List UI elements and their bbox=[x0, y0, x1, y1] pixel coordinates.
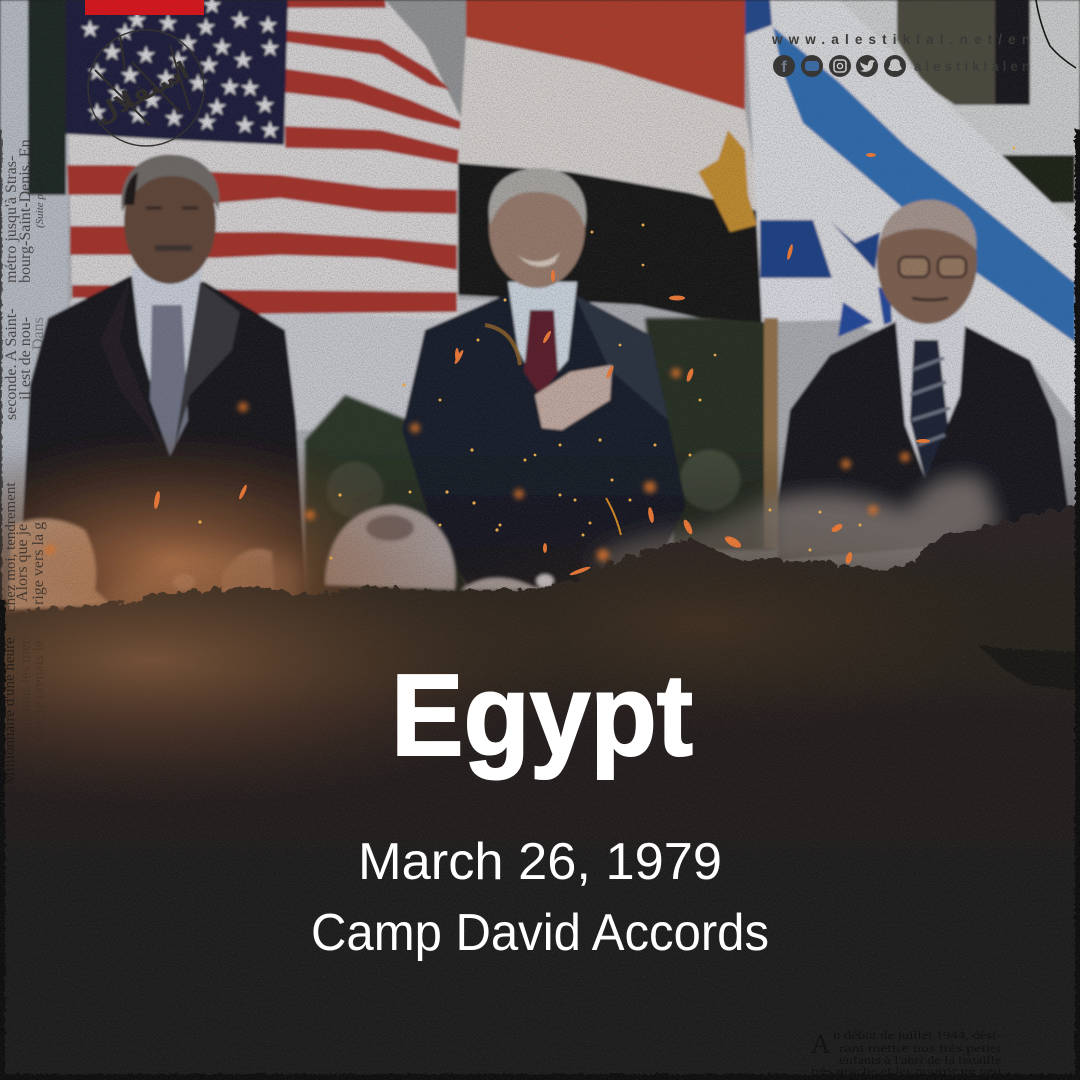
newspaper overlay: bottom right bbox=[811, 1029, 1002, 1078]
top right crack bbox=[1036, 0, 1076, 68]
newspaper overlay: bottom right: très proche et les nourrir un peu bbox=[811, 1066, 1001, 1078]
newspaper overlay: left edge: credis soir, je prenais le bbox=[31, 640, 47, 782]
stars: ★ bbox=[155, 64, 177, 92]
newspaper overlay: left edge: Dans bbox=[30, 317, 47, 350]
logo: circular calligraphy seal bbox=[88, 30, 204, 146]
stars: ★ bbox=[229, 6, 251, 34]
stars: ★ bbox=[79, 15, 101, 43]
stars: ★ bbox=[106, 79, 128, 107]
smoke haze bbox=[100, 474, 1000, 610]
icon: facebook bbox=[773, 55, 795, 77]
suit shading bbox=[0, 440, 1080, 600]
newspaper overlay: left edge: Millionnaire d'une heure bbox=[2, 637, 18, 785]
newspaper overlay: bottom right: enfants à l'abri de la bataille bbox=[839, 1055, 1001, 1067]
stars: ★ bbox=[86, 58, 108, 86]
stars: ★ bbox=[177, 29, 199, 57]
stars: ★ bbox=[234, 111, 256, 139]
torn crack mark bbox=[978, 645, 1075, 690]
photograph: leaders before flags bbox=[0, 0, 1080, 690]
newspaper overlay: left edge: rige vers la g bbox=[30, 522, 47, 605]
stars: ★ bbox=[196, 108, 218, 136]
stars: ★ bbox=[114, 18, 136, 46]
stars: ★ bbox=[163, 104, 185, 132]
newspaper overlay: left edge: (Suite page 11) bbox=[34, 161, 46, 228]
stars bbox=[79, 0, 281, 144]
newspaper overlay: bottom right: rant mettre nos très petits bbox=[839, 1043, 1002, 1055]
stars: ★ bbox=[257, 11, 279, 39]
social icons bbox=[773, 55, 1030, 77]
stars: ★ bbox=[259, 34, 281, 62]
icon: twitter bbox=[856, 55, 878, 77]
egyptian flag bbox=[458, 0, 762, 322]
stars: ★ bbox=[187, 69, 209, 97]
stars: ★ bbox=[126, 6, 148, 34]
stars: ★ bbox=[195, 13, 217, 41]
stars: ★ bbox=[101, 38, 123, 66]
stars: ★ bbox=[167, 46, 189, 74]
stars: ★ bbox=[206, 93, 228, 121]
golden arc flare bbox=[485, 325, 520, 365]
date line: March 26, 1979 bbox=[358, 833, 722, 891]
stars: ★ bbox=[127, 101, 149, 129]
embers bbox=[45, 147, 1015, 577]
newspaper overlay: left edge: il est de nou- bbox=[17, 317, 34, 400]
torn dark paper panel bbox=[0, 505, 1080, 1080]
stars: ★ bbox=[135, 41, 157, 69]
icon: facebook: f bbox=[781, 59, 787, 76]
stars: ★ bbox=[211, 33, 233, 61]
icon: snapchat bbox=[884, 55, 906, 77]
right man: Begin bbox=[778, 200, 1072, 560]
stars: ★ bbox=[254, 91, 276, 119]
stars: ★ bbox=[219, 73, 241, 101]
left orange flare bbox=[0, 430, 440, 690]
stars: ★ bbox=[119, 61, 141, 89]
newspaper overlay: bottom right: u début de juillet 1944, dési- bbox=[833, 1030, 1001, 1042]
orange glow on panel bbox=[0, 515, 570, 805]
newspaper overlay: left edge: métro jusqu'à Stras- bbox=[3, 156, 20, 283]
logo: circular calligraphy seal: استقلال bbox=[90, 56, 194, 129]
newspaper overlay: left edge: seconde. A Saint- bbox=[3, 308, 20, 420]
building backdrop bbox=[0, 0, 1080, 600]
curved ember trail bbox=[606, 498, 621, 535]
newspaper overlay: left edge: chez moi, tendrement bbox=[3, 482, 19, 612]
red tab bbox=[85, 0, 204, 15]
american flag bbox=[66, 0, 486, 320]
heading: Egypt: Egypt bbox=[391, 650, 693, 780]
israeli flag bbox=[745, 0, 1075, 420]
centre man: Carter bbox=[402, 168, 686, 590]
stripes bbox=[67, 0, 486, 314]
left man: Sadat bbox=[18, 155, 306, 610]
hedges bbox=[305, 318, 775, 600]
stars: ★ bbox=[157, 9, 179, 37]
flag pole bbox=[764, 318, 778, 548]
icon: youtube bbox=[801, 55, 823, 77]
newspaper overlay: left edge: Presque tous les mer- bbox=[18, 635, 34, 763]
ember glows bbox=[45, 368, 910, 561]
social handle: alestiklalen bbox=[914, 59, 1030, 74]
newspaper overlay: left edge bbox=[2, 139, 47, 785]
stars: ★ bbox=[141, 86, 163, 114]
newspaper overlay: bottom right: A bbox=[811, 1029, 831, 1059]
stars: ★ bbox=[232, 46, 254, 74]
foreground heads bbox=[8, 505, 554, 610]
ember sparks bbox=[198, 147, 1015, 560]
icon: instagram bbox=[829, 55, 851, 77]
ember streaks bbox=[153, 153, 930, 577]
subtitle line: Camp David Accords bbox=[311, 904, 769, 962]
stars: ★ bbox=[259, 116, 281, 144]
website address: www.alestiklal.net/en bbox=[771, 32, 1030, 47]
newspaper overlay: left edge: bourg-Saint-Denis. En bbox=[17, 139, 34, 283]
newspaper overlay: left edge: Alors que je bbox=[14, 524, 31, 602]
stars: ★ bbox=[86, 98, 108, 126]
stars: ★ bbox=[239, 74, 261, 102]
brown glow on panel bbox=[370, 515, 1030, 735]
stars: ★ bbox=[198, 51, 220, 79]
